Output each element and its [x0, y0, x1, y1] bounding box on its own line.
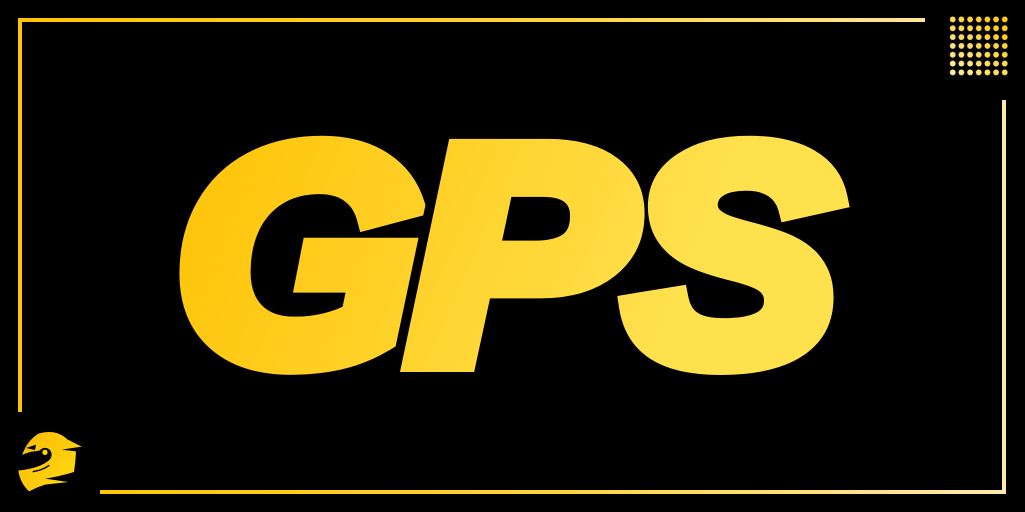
title: GPS: G	[176, 85, 422, 425]
title: GPS: S	[628, 85, 840, 425]
icon: racing helmet	[17, 432, 82, 491]
frame: top and left border	[20, 20, 925, 412]
frame: right and bottom border	[100, 100, 1004, 492]
title: GPS: P	[410, 86, 633, 425]
title: GPS	[176, 85, 840, 425]
dot grid	[948, 15, 1009, 77]
